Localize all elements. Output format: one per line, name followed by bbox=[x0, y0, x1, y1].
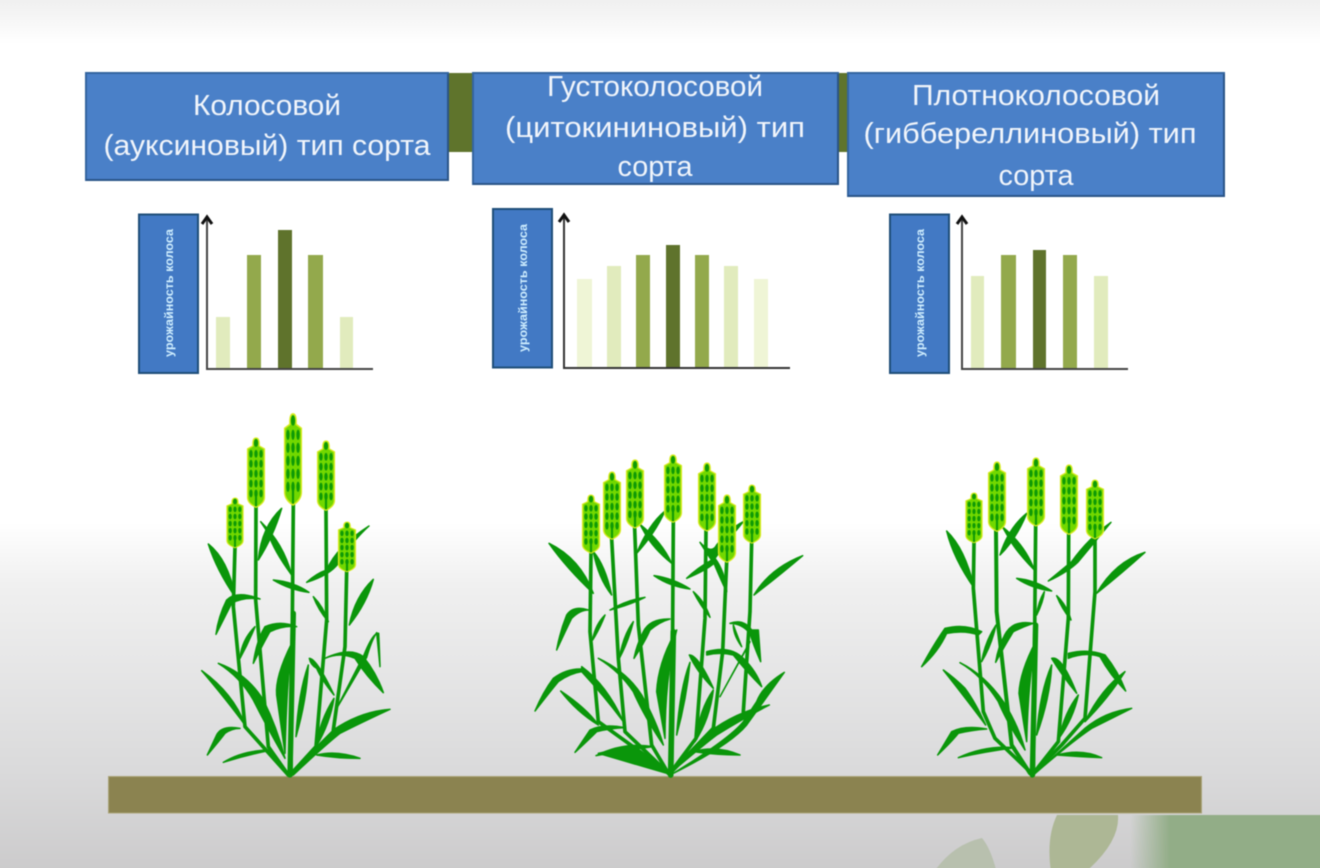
header: auxin type: Колосовой bbox=[193, 90, 341, 122]
header: auxin type: (ауксиновый) тип сорта bbox=[104, 130, 431, 162]
bar chart: cytokinin type bbox=[493, 209, 790, 368]
plant: auxin type wheat bbox=[202, 414, 390, 775]
header: auxin type bbox=[86, 73, 448, 180]
corner decoration: green leaves bbox=[930, 815, 1320, 868]
ground strip bbox=[108, 776, 1202, 813]
plant: cytokinin type wheat bbox=[535, 455, 803, 775]
header: gibberellin type: (гиббереллиновый) тип bbox=[864, 118, 1196, 150]
header: cytokinin type bbox=[473, 71, 838, 184]
bar chart: gibberellin type bbox=[890, 214, 1128, 373]
bar chart: auxin type bbox=[139, 214, 373, 373]
bar chart: gibberellin type: урожайность колоса bbox=[913, 229, 927, 357]
header: gibberellin type: сорта bbox=[998, 160, 1074, 192]
bar chart: cytokinin type: урожайность колоса bbox=[516, 224, 530, 352]
header: cytokinin type: (цитокининовый) тип bbox=[505, 112, 805, 144]
header: cytokinin type: Густоколосовой bbox=[547, 71, 763, 103]
header: gibberellin type: Плотноколосовой bbox=[912, 80, 1160, 112]
header: cytokinin type: сорта bbox=[618, 151, 693, 183]
bar chart: auxin type: урожайность колоса bbox=[162, 229, 176, 357]
olive band behind headers bbox=[449, 73, 849, 152]
plant: gibberellin type wheat bbox=[922, 458, 1145, 775]
header: gibberellin type bbox=[848, 73, 1224, 196]
